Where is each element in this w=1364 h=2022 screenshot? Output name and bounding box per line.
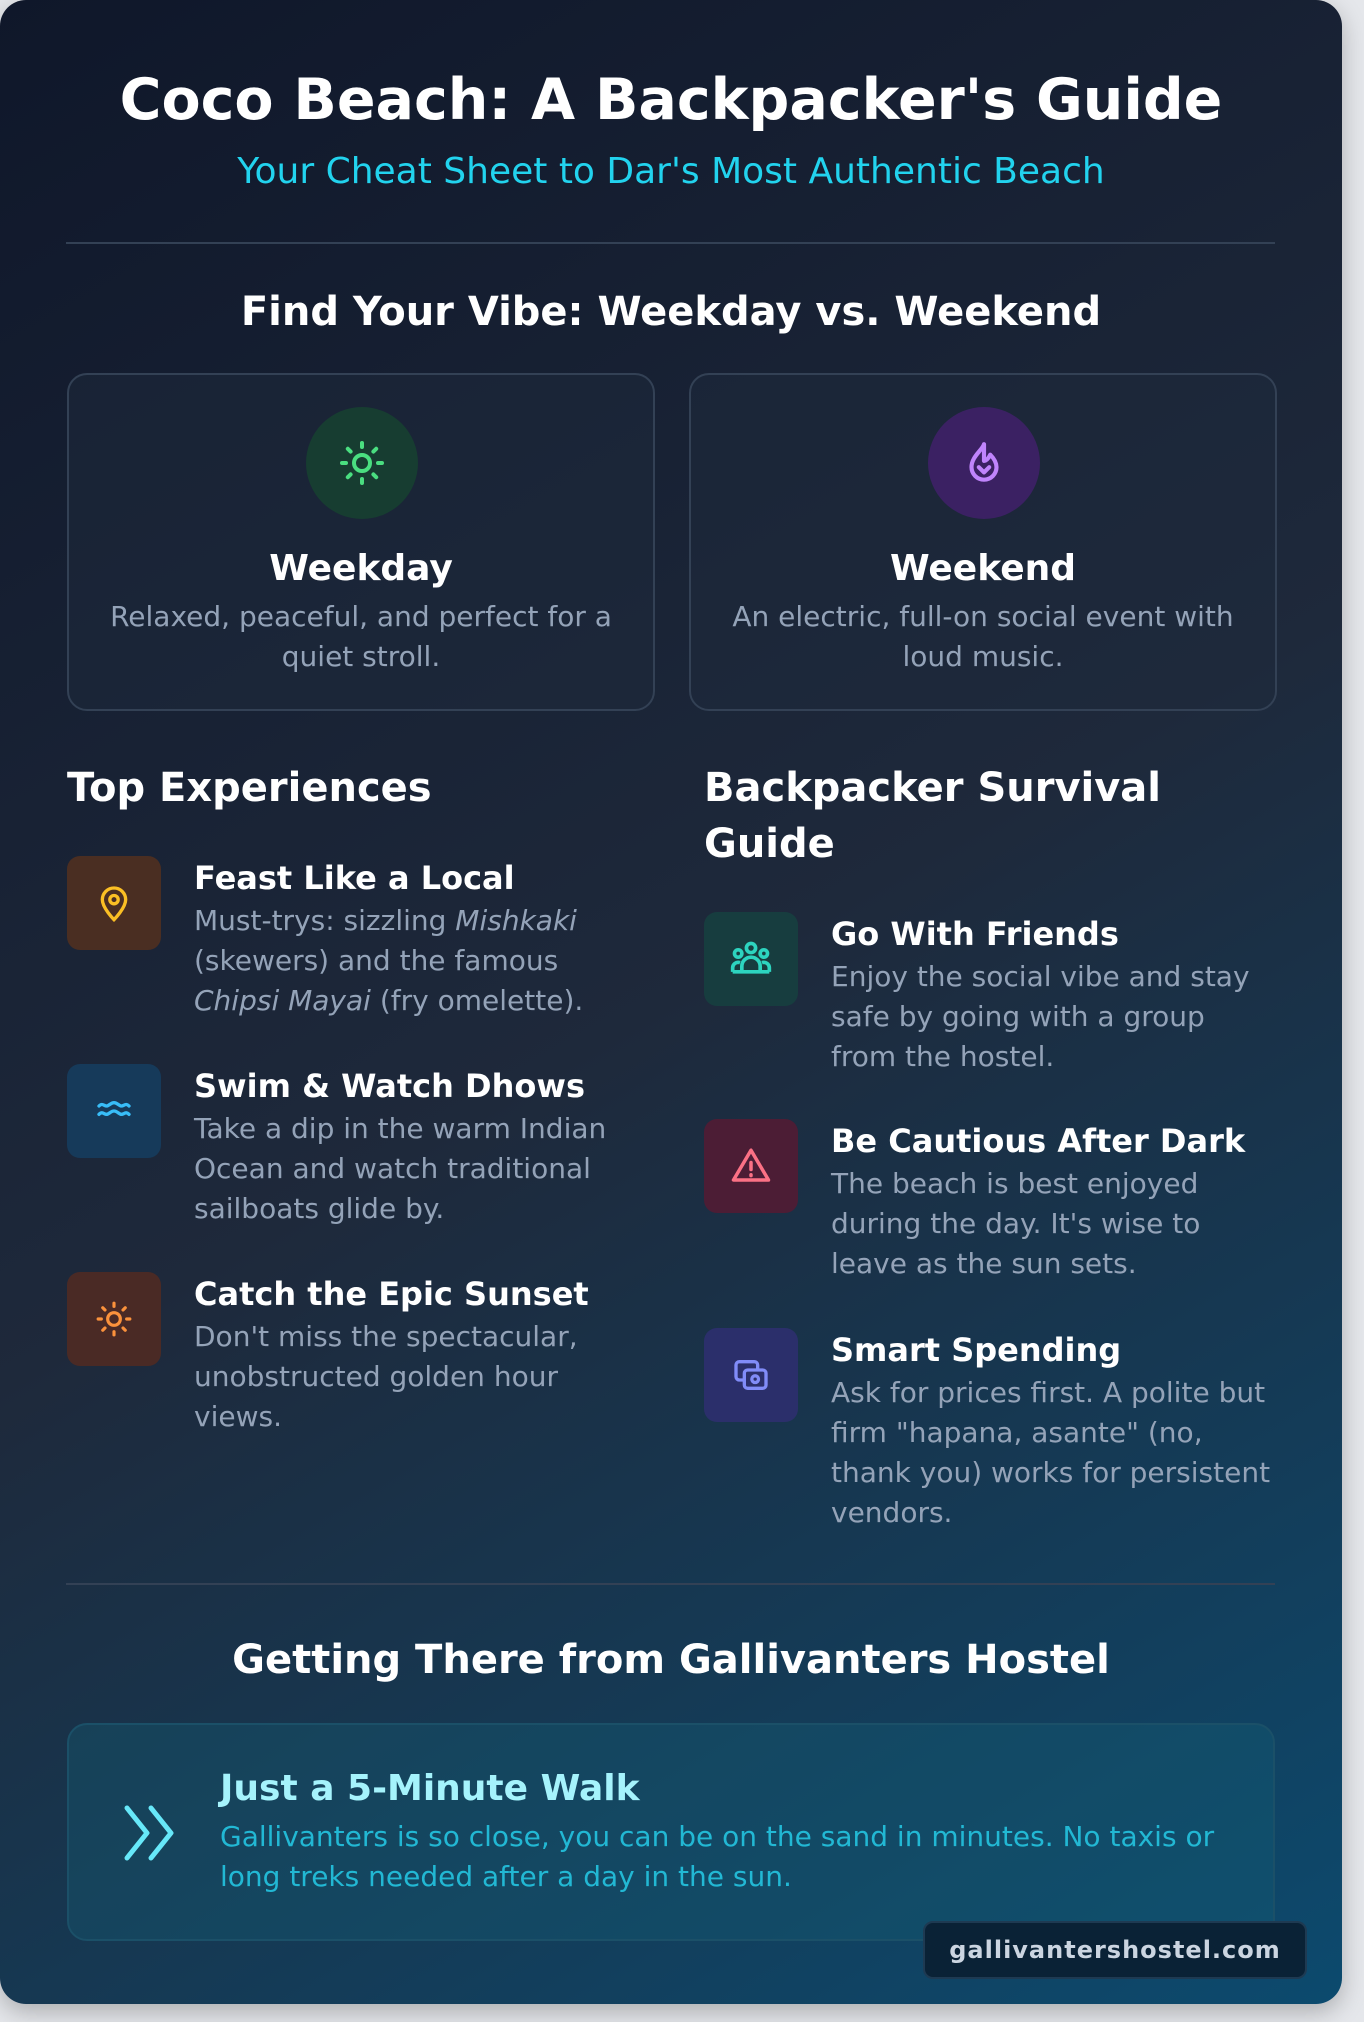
weekday text: Relaxed, peaceful, and perfect for a quiet stroll. [110,600,612,673]
weekend text: An electric, full-on social event with loud music. [732,600,1234,673]
item: sunset: Catch the Epic Sunset [194,1275,589,1313]
icon: chevrons [124,1806,174,1860]
heading: getting there: Getting There from Gallivanters Hostel [232,1637,1110,1683]
item: friends: Go With Friends [831,915,1119,953]
item: caution: Be Cautious After Dark [831,1122,1245,1160]
icon: sun [306,407,418,519]
icon: pin [67,856,161,950]
panel: weekend [689,373,1277,711]
callout title: Just a 5-Minute Walk [220,1768,640,1809]
icon: sun [67,1272,161,1366]
callout: walk [67,1723,1275,1941]
heading: top experiences: Top Experiences [67,765,432,811]
icon: warning [704,1119,798,1213]
item: feast: Must-trys: sizzling Mishkaki (skewers) and the famous Chipsi Mayai (fry omelette). [194,904,583,1017]
icon: flame [928,407,1040,519]
item: friends: Enjoy the social vibe and stay safe by going with a group from the hostel. [831,960,1250,1073]
title: Coco Beach: A Backpacker's Guide [120,67,1222,133]
badge: website [923,1921,1307,1979]
item: sunset: Don't miss the spectacular, unobstructed golden hour views. [194,1320,578,1433]
icon: group [704,912,798,1006]
item: spending: Ask for prices first. A polite but firm "hapana, asante" (no, thank you) works for persistent vendors. [831,1376,1270,1529]
icon: waves [67,1064,161,1158]
callout text: Gallivanters is so close, you can be on the sand in minutes. No taxis or long treks needed after a day in the sun. [220,1820,1214,1893]
panel: weekday [67,373,655,711]
subtitle: Your Cheat Sheet to Dar's Most Authentic Beach [237,151,1105,192]
item: swim [67,1064,606,1225]
item: swim: Take a dip in the warm Indian Ocean and watch traditional sailboats glide by. [194,1112,606,1225]
weekend title: Weekend [890,548,1076,589]
item: caution: The beach is best enjoyed during the day. It's wise to leave as the sun sets. [831,1167,1200,1280]
item: swim: Swim & Watch Dhows [194,1067,585,1105]
item: feast: Feast Like a Local [194,859,515,897]
item: sunset [67,1272,589,1433]
weekday title: Weekday [269,548,453,589]
item: spending: Smart Spending [831,1331,1121,1369]
item: spending [704,1328,1270,1529]
badge: website: gallivantershostel.com [949,1936,1281,1964]
heading: vibe: Find Your Vibe: Weekday vs. Weekend [241,289,1101,335]
icon: money [704,1328,798,1422]
item: friends [704,912,1250,1073]
heading: survival guide: Backpacker Survival Guide [704,765,1161,867]
item: feast [67,856,583,1017]
item: caution [704,1119,1246,1280]
